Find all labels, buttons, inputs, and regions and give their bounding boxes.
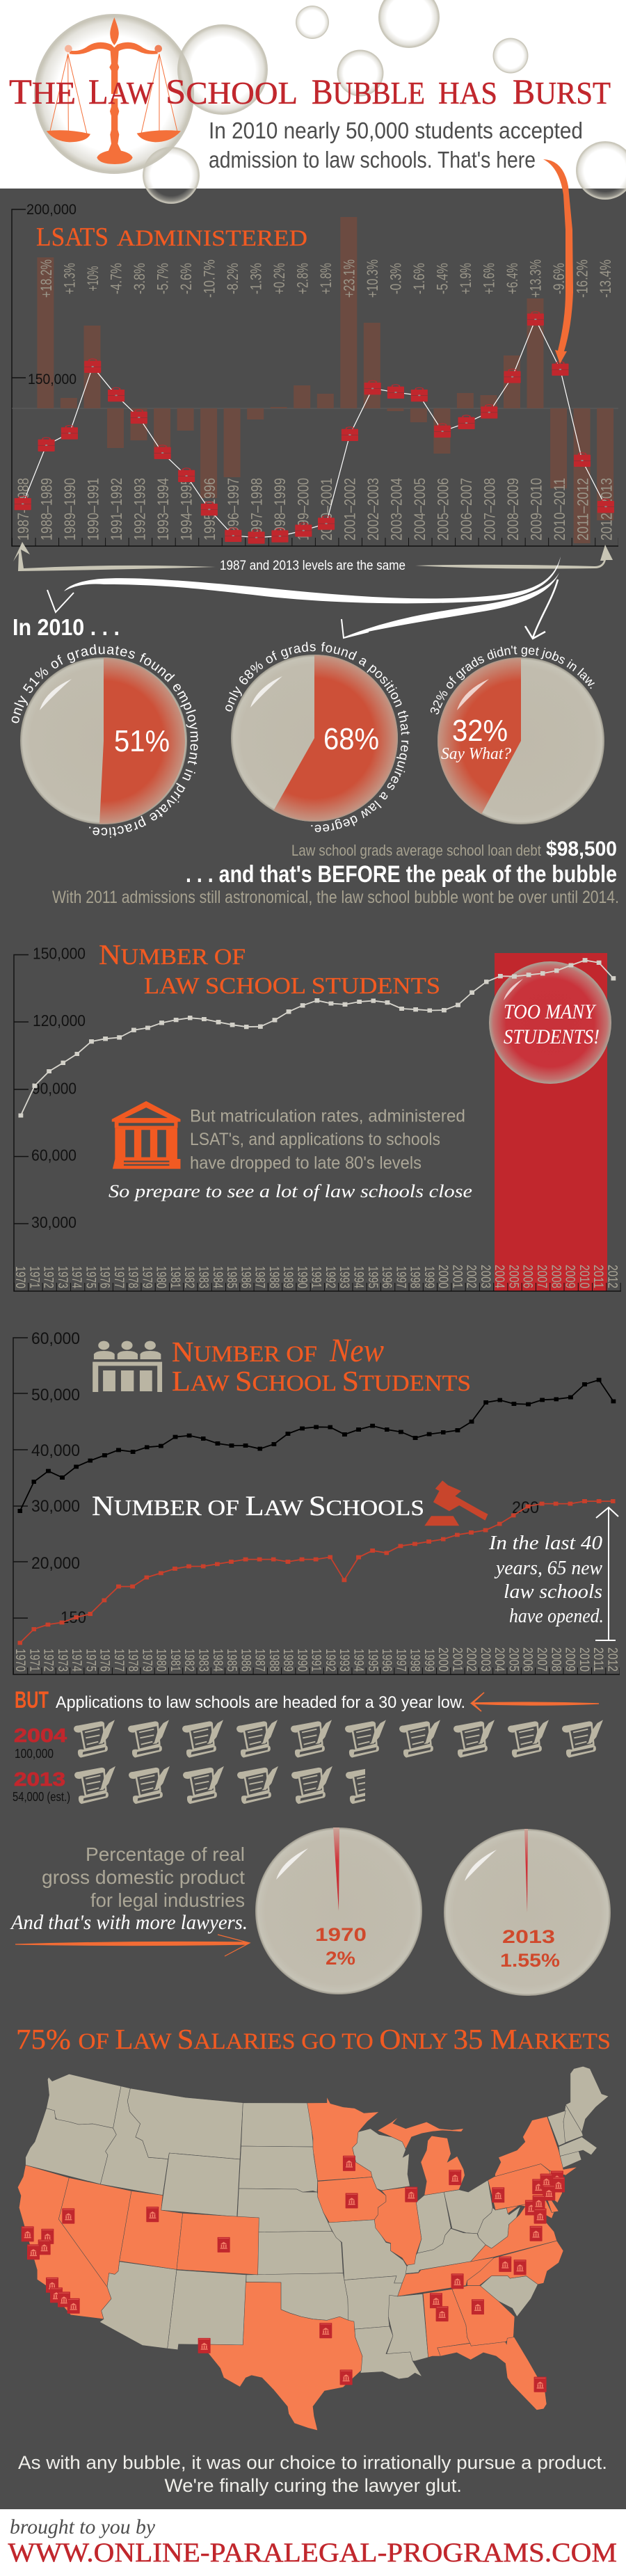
text: matriculation note: have dropped to late 80's levels [190,1153,422,1173]
year labels: 1986 [238,1266,252,1288]
year labels: 1986 [238,1649,252,1672]
heading: In 2010: In 2010 . . . [13,614,120,640]
year range labels: 2009–2010 [528,478,545,541]
year labels: 1972 [40,1649,56,1672]
line: number of new students [20,1380,613,1511]
axis labels: 150 [61,1608,86,1627]
applications pictogram 2013: 2013 [14,1768,65,1790]
year labels: 1979 [139,1266,154,1288]
bubble: too many students: STUDENTS! [504,1025,600,1048]
year range labels: 2005–2006 [434,478,452,541]
closing statement [18,2452,607,2496]
icon: gavel [424,1480,488,1526]
year labels: 1984 [210,1649,225,1672]
year labels: 1975 [83,1266,97,1288]
percentage change labels: +2.8% [294,263,312,294]
arrow: brush swoosh to 32% [525,579,558,639]
year labels: 2002 [464,1265,479,1288]
year labels: 2012 [604,1265,619,1288]
arrow: to 2013 [415,545,613,569]
title: HAS [438,76,497,111]
axis labels [31,1329,539,1627]
percentage change labels: +0.2% [271,263,288,294]
year labels: 2011 [591,1647,605,1672]
year range labels: 2006–2007 [458,478,475,541]
axis labels: 120,000 [33,1011,86,1030]
text: loan debt: Law school grads average school loan debt [291,842,541,859]
year labels: 1984 [210,1266,225,1288]
chart title: LSATS [36,223,109,252]
pie: 32 percent [430,646,604,824]
year labels: 1983 [196,1649,210,1672]
title: LAW [88,73,154,112]
applications pictogram 2004 [14,1720,603,1761]
handwritten note: 65 new law schools: have opened. [509,1606,604,1627]
axis labels: 50,000 [31,1386,80,1405]
year labels: 2000 [435,1647,450,1672]
year labels: 2001 [449,1265,464,1288]
pie: 32 percent: 32% [452,714,508,748]
year labels: 1980 [154,1266,168,1288]
chart title [36,223,307,252]
year labels: 1993 [337,1649,351,1672]
pie: 2013 legal share of GDP: 2013 [502,1926,555,1947]
pie: 32 percent: 32% of grads didn't get jobs in law. [430,646,595,714]
percentage change labels: -13.4% [597,259,614,298]
axis labels: 40,000 [31,1441,80,1460]
year range labels: 2011–2012 [575,478,592,541]
percentage change labels: +1.6% [480,263,498,294]
year range labels: 2012–2013 [597,478,615,541]
pie: 51 percent: only 51% of graduates found employment in private practice. [11,644,198,838]
axis labels: 200,000 [26,202,77,218]
percentage change labels: +23.1% [341,259,358,298]
year range labels: 1991–1992 [108,478,125,541]
percentage change labels: +10.3% [364,259,381,298]
footer credit: WWW.ONLINE-PARALEGAL-PROGRAMS.COM [8,2538,617,2568]
year labels: 2003 [478,1265,492,1288]
percentage change labels: +1.9% [457,263,474,294]
chart axes [12,209,618,546]
percentage change labels: -1.6% [410,263,428,294]
year range labels: 1994–1995 [178,478,195,541]
year labels: 1996 [379,1649,394,1672]
year labels: 1972 [40,1266,56,1288]
arrow: to 1987 [13,542,216,571]
year labels: 1978 [125,1649,140,1672]
year range labels: 1989–1990 [61,478,79,541]
year labels: 1999 [422,1649,436,1672]
chart: number of law school students [13,938,621,1291]
year labels: 1974 [69,1649,83,1672]
pie: 32 percent: Say What? [441,745,511,763]
year range labels: 1988–1989 [38,478,56,541]
year range labels: 2002–2003 [364,478,382,541]
handwritten note: 65 new law schools [488,1533,604,1627]
axes [14,954,621,1291]
year range labels: 1996–1997 [225,478,242,541]
title: THE [9,73,76,112]
axis labels: 200 [512,1498,539,1517]
chart: new students and number of law schools [13,1329,620,1674]
year labels: 1977 [111,1266,126,1288]
pie: 2013 legal share of GDP: 1.55% [500,1950,560,1971]
percentage change labels: -9.6% [550,263,568,294]
percentage change labels: -2.6% [177,263,195,294]
pie: 1970 legal share of GDP: 1970 [315,1924,367,1945]
year labels: 1994 [351,1649,366,1672]
intro text: In 2010 nearly 50,000 students accepted [209,118,583,143]
year labels: 2005 [506,1647,520,1672]
map: United States [17,2066,609,2431]
year range labels: 1997–1998 [248,478,265,541]
arrow: up to 2012 [595,1507,618,1640]
percentage change labels: -3.8% [131,263,148,294]
chart title: law schools: NUMBER OF LAW SCHOOLS [92,1490,424,1521]
pie: 1970 legal share of GDP [255,1827,422,1994]
axis labels: 60,000 [31,1146,77,1165]
chart title: new students: LAW SCHOOL STUDENTS [172,1365,471,1397]
percentage change labels: -4.7% [107,263,125,294]
year labels: 1981 [168,1266,182,1288]
chart: LSATs administered [12,202,618,546]
percentage change labels: +1.8% [317,263,335,294]
chart title: new students [172,1332,471,1397]
pie: 2013 legal share of GDP [444,1829,611,1996]
icon: students at a bench [93,1341,162,1392]
axis labels [26,202,77,387]
icon: scales of justice [47,17,181,164]
text: percentage of real GDP: Percentage of real [86,1843,245,1865]
too many students highlight column [495,953,607,1291]
year labels: 1983 [196,1266,210,1288]
year labels: 2004 [492,1265,506,1288]
percentage change labels: -8.2% [224,263,241,294]
axis labels [31,945,86,1231]
year labels: 1988 [266,1266,281,1288]
year labels: 2006 [520,1647,535,1672]
year labels: 2007 [534,1647,549,1672]
year labels: 2010 [577,1265,591,1288]
axis labels: 20,000 [31,1554,80,1573]
map: non-market states [26,2066,609,2379]
chart title [99,938,440,999]
year labels: 2005 [506,1265,520,1288]
chart title: NUMBER OF [99,938,246,970]
intro text [209,118,583,173]
year labels: 1995 [365,1266,380,1288]
year labels: 1992 [323,1649,337,1672]
year labels: 1971 [26,1266,41,1288]
annotation: 1987 and 2013 levels are the same: 1987 and 2013 levels are the same [220,559,406,573]
icon: courthouse [112,1101,180,1169]
year range labels: 2007–2008 [481,478,499,541]
title [9,73,611,112]
chart title: new students: New [329,1332,384,1369]
axis labels: 30,000 [31,1213,77,1231]
year labels: 1996 [379,1266,394,1288]
annotation: 1987 and 2013 levels are the same [13,542,613,573]
axis labels: 60,000 [31,1329,80,1348]
handwritten note: more lawyers: And that's with more lawyers. [10,1911,248,1934]
year labels: 2008 [548,1265,563,1288]
handwritten note: 65 new law schools: law schools [504,1581,602,1603]
pie: 1970 legal share of GDP: 2% [326,1948,355,1969]
header bubbles [34,0,626,204]
year labels: 2006 [520,1265,535,1288]
text: percentage of real GDP: gross domestic product [42,1866,245,1888]
year range labels: 1998–1999 [271,478,289,541]
title: BURST [513,73,611,112]
bubble: too many students [489,961,611,1084]
year range labels: 1992–1993 [131,478,149,541]
year labels: 1976 [97,1266,112,1288]
heading: 75% of law salaries: 75% OF LAW SALARIES GO TO ONLY 35 MARKETS [16,2023,611,2055]
year labels: 1973 [55,1266,70,1288]
year range labels: 2004–2005 [411,478,428,541]
percentage change labels: -16.2% [573,259,591,298]
percentage change labels: -5.7% [154,263,171,294]
arrow: from "That's here" to 2010-2011 [543,159,573,364]
year range labels: 1993–1994 [154,478,172,541]
arrow: brush swoosh to 68% [342,573,559,638]
year range labels: 2000–2001 [318,478,335,541]
percentage change labels: +13.3% [527,259,544,298]
year range labels: 1995–1996 [201,478,218,541]
year labels: 2010 [577,1647,591,1672]
callout: applications headed for a 30 year low [15,1687,599,1713]
year range labels: 2008–2009 [504,478,522,541]
percentage change labels [38,259,614,298]
year labels: 1997 [393,1649,408,1672]
year labels: 1980 [154,1649,168,1672]
year labels: 1991 [309,1649,323,1672]
year labels: 1974 [69,1266,83,1288]
year labels: 1998 [408,1266,422,1288]
year labels: 1982 [182,1649,196,1672]
year labels: 2000 [435,1265,450,1288]
year labels: 2008 [548,1647,563,1672]
year labels: 1989 [280,1649,295,1672]
year labels: 1998 [408,1649,422,1672]
handwritten note: 65 new law schools: In the last 40 [488,1533,602,1554]
arrow: brush swoosh to 51% [47,557,561,612]
percentage change labels: -0.3% [387,263,405,294]
year labels: 2011 [591,1265,605,1288]
applications pictogram 2004: 100,000 [15,1747,54,1761]
line: number of law schools [20,1501,613,1643]
footer credit: brought to you by [10,2515,156,2538]
percentage change labels: +6.4% [504,263,521,294]
year labels: 1988 [266,1649,281,1672]
year labels: 1987 [252,1649,267,1672]
year labels: 2002 [464,1647,479,1672]
pie: 68 percent: 68% [323,722,379,756]
arrow: pointing left [472,1693,599,1711]
line: students [21,960,613,1116]
year labels: 1977 [111,1649,126,1672]
handwritten note: 65 new law schools: years, 65 new [494,1558,602,1579]
year labels: 1985 [224,1266,239,1288]
year labels: 1994 [351,1266,366,1288]
year range labels: 1990–1991 [85,478,102,541]
year range labels: 2003–2004 [388,478,405,541]
year range labels [15,478,615,541]
percentage change labels: +18.2% [38,259,55,298]
title: BUBBLE [312,73,425,112]
handwritten note: So prepare to see a lot of law schools close [109,1181,472,1201]
intro text: admission to law schools. That's here [209,147,536,173]
percentage change labels: -10.7% [200,259,218,298]
axis labels: 30,000 [31,1497,80,1516]
LSAT line with briefcase markers [15,312,614,544]
year labels [13,1647,619,1672]
year range labels: 1999–2000 [294,478,312,541]
text: matriculation note [190,1106,465,1173]
closing statement: As with any bubble, it was our choice to irrationally pursue a product. [18,2452,607,2473]
text: matriculation note: But matriculation rates, administered [190,1106,465,1126]
year labels: 1970 [13,1266,27,1288]
chart title: new students: NUMBER OF [172,1336,317,1368]
closing statement: We're finally curing the lawyer glut. [164,2475,462,2496]
year range labels: 2001–2002 [341,478,358,541]
year labels: 1973 [55,1649,70,1672]
text: loan debt [291,838,617,861]
chart title: LAW SCHOOL STUDENTS [144,973,440,999]
arrow: to GDP bubbles [15,1935,250,1956]
year labels: 2003 [478,1647,492,1672]
year labels: 1979 [139,1649,154,1672]
year labels: 1987 [252,1266,267,1288]
year labels [13,1265,619,1288]
percentage change labels: -1.3% [248,263,264,294]
year labels: 1981 [168,1649,182,1672]
year labels: 1992 [323,1266,337,1288]
text: percentage of real GDP: for legal industries [90,1889,245,1911]
year labels: 2001 [449,1647,464,1672]
pie: 51 percent: 51% [114,724,170,758]
axis labels: 150,000 [33,945,86,963]
chart title: ADMINISTERED [117,226,307,251]
year labels: 1970 [13,1649,27,1672]
title: SCHOOL [166,73,298,112]
year labels: 1971 [26,1649,41,1672]
year labels: 2004 [492,1647,506,1672]
bubble: too many students: TOO MANY [504,1000,597,1023]
year labels: 1978 [125,1266,140,1288]
axis labels: 90,000 [32,1080,77,1098]
year labels: 1976 [97,1649,112,1672]
year range labels: 1987–1988 [15,478,32,541]
year labels: 1990 [294,1649,309,1672]
text: loan debt: $98,500 [546,838,617,861]
text: matriculation note: LSAT's, and applications to schools [190,1130,440,1149]
axis labels: 150,000 [28,371,77,387]
percentage change labels: -5.4% [434,263,451,294]
year labels: 1985 [224,1649,239,1672]
year labels: 1993 [337,1266,351,1288]
year range labels: 2010–2011 [551,478,568,541]
year-over-year change bars [37,217,613,543]
year labels: 1995 [365,1649,380,1672]
map: market markers [22,2156,565,2392]
year labels: 2009 [562,1265,577,1288]
year labels: 2012 [604,1647,619,1672]
callout: applications headed for a 30 year low: BUT [15,1687,49,1713]
year labels: 1982 [182,1266,196,1288]
year labels: 1990 [294,1266,309,1288]
footer credit [8,2515,617,2568]
percentage change labels: +10% [84,266,102,291]
pie: 68 percent: only 68% of grads found a position that requires a law degree. [225,641,410,832]
year labels: 2009 [562,1647,577,1672]
year labels: 1997 [393,1266,408,1288]
year labels: 1999 [422,1266,436,1288]
map: market states [17,2097,577,2431]
applications pictogram 2013: 54,000 (est.) [13,1790,70,1804]
applications pictogram 2013 [13,1766,387,1804]
axes [13,1338,620,1674]
callout: applications headed for a 30 year low: Applications to law schools are headed for a 30 year low. [56,1693,465,1712]
text: percentage of real GDP [42,1843,245,1911]
applications pictogram 2004: 2004 [14,1725,67,1746]
year labels: 1989 [280,1266,295,1288]
year labels: 1991 [309,1266,323,1288]
percentage change labels: +1.3% [61,263,78,294]
year labels: 2007 [534,1265,549,1288]
year labels: 1975 [83,1649,97,1672]
